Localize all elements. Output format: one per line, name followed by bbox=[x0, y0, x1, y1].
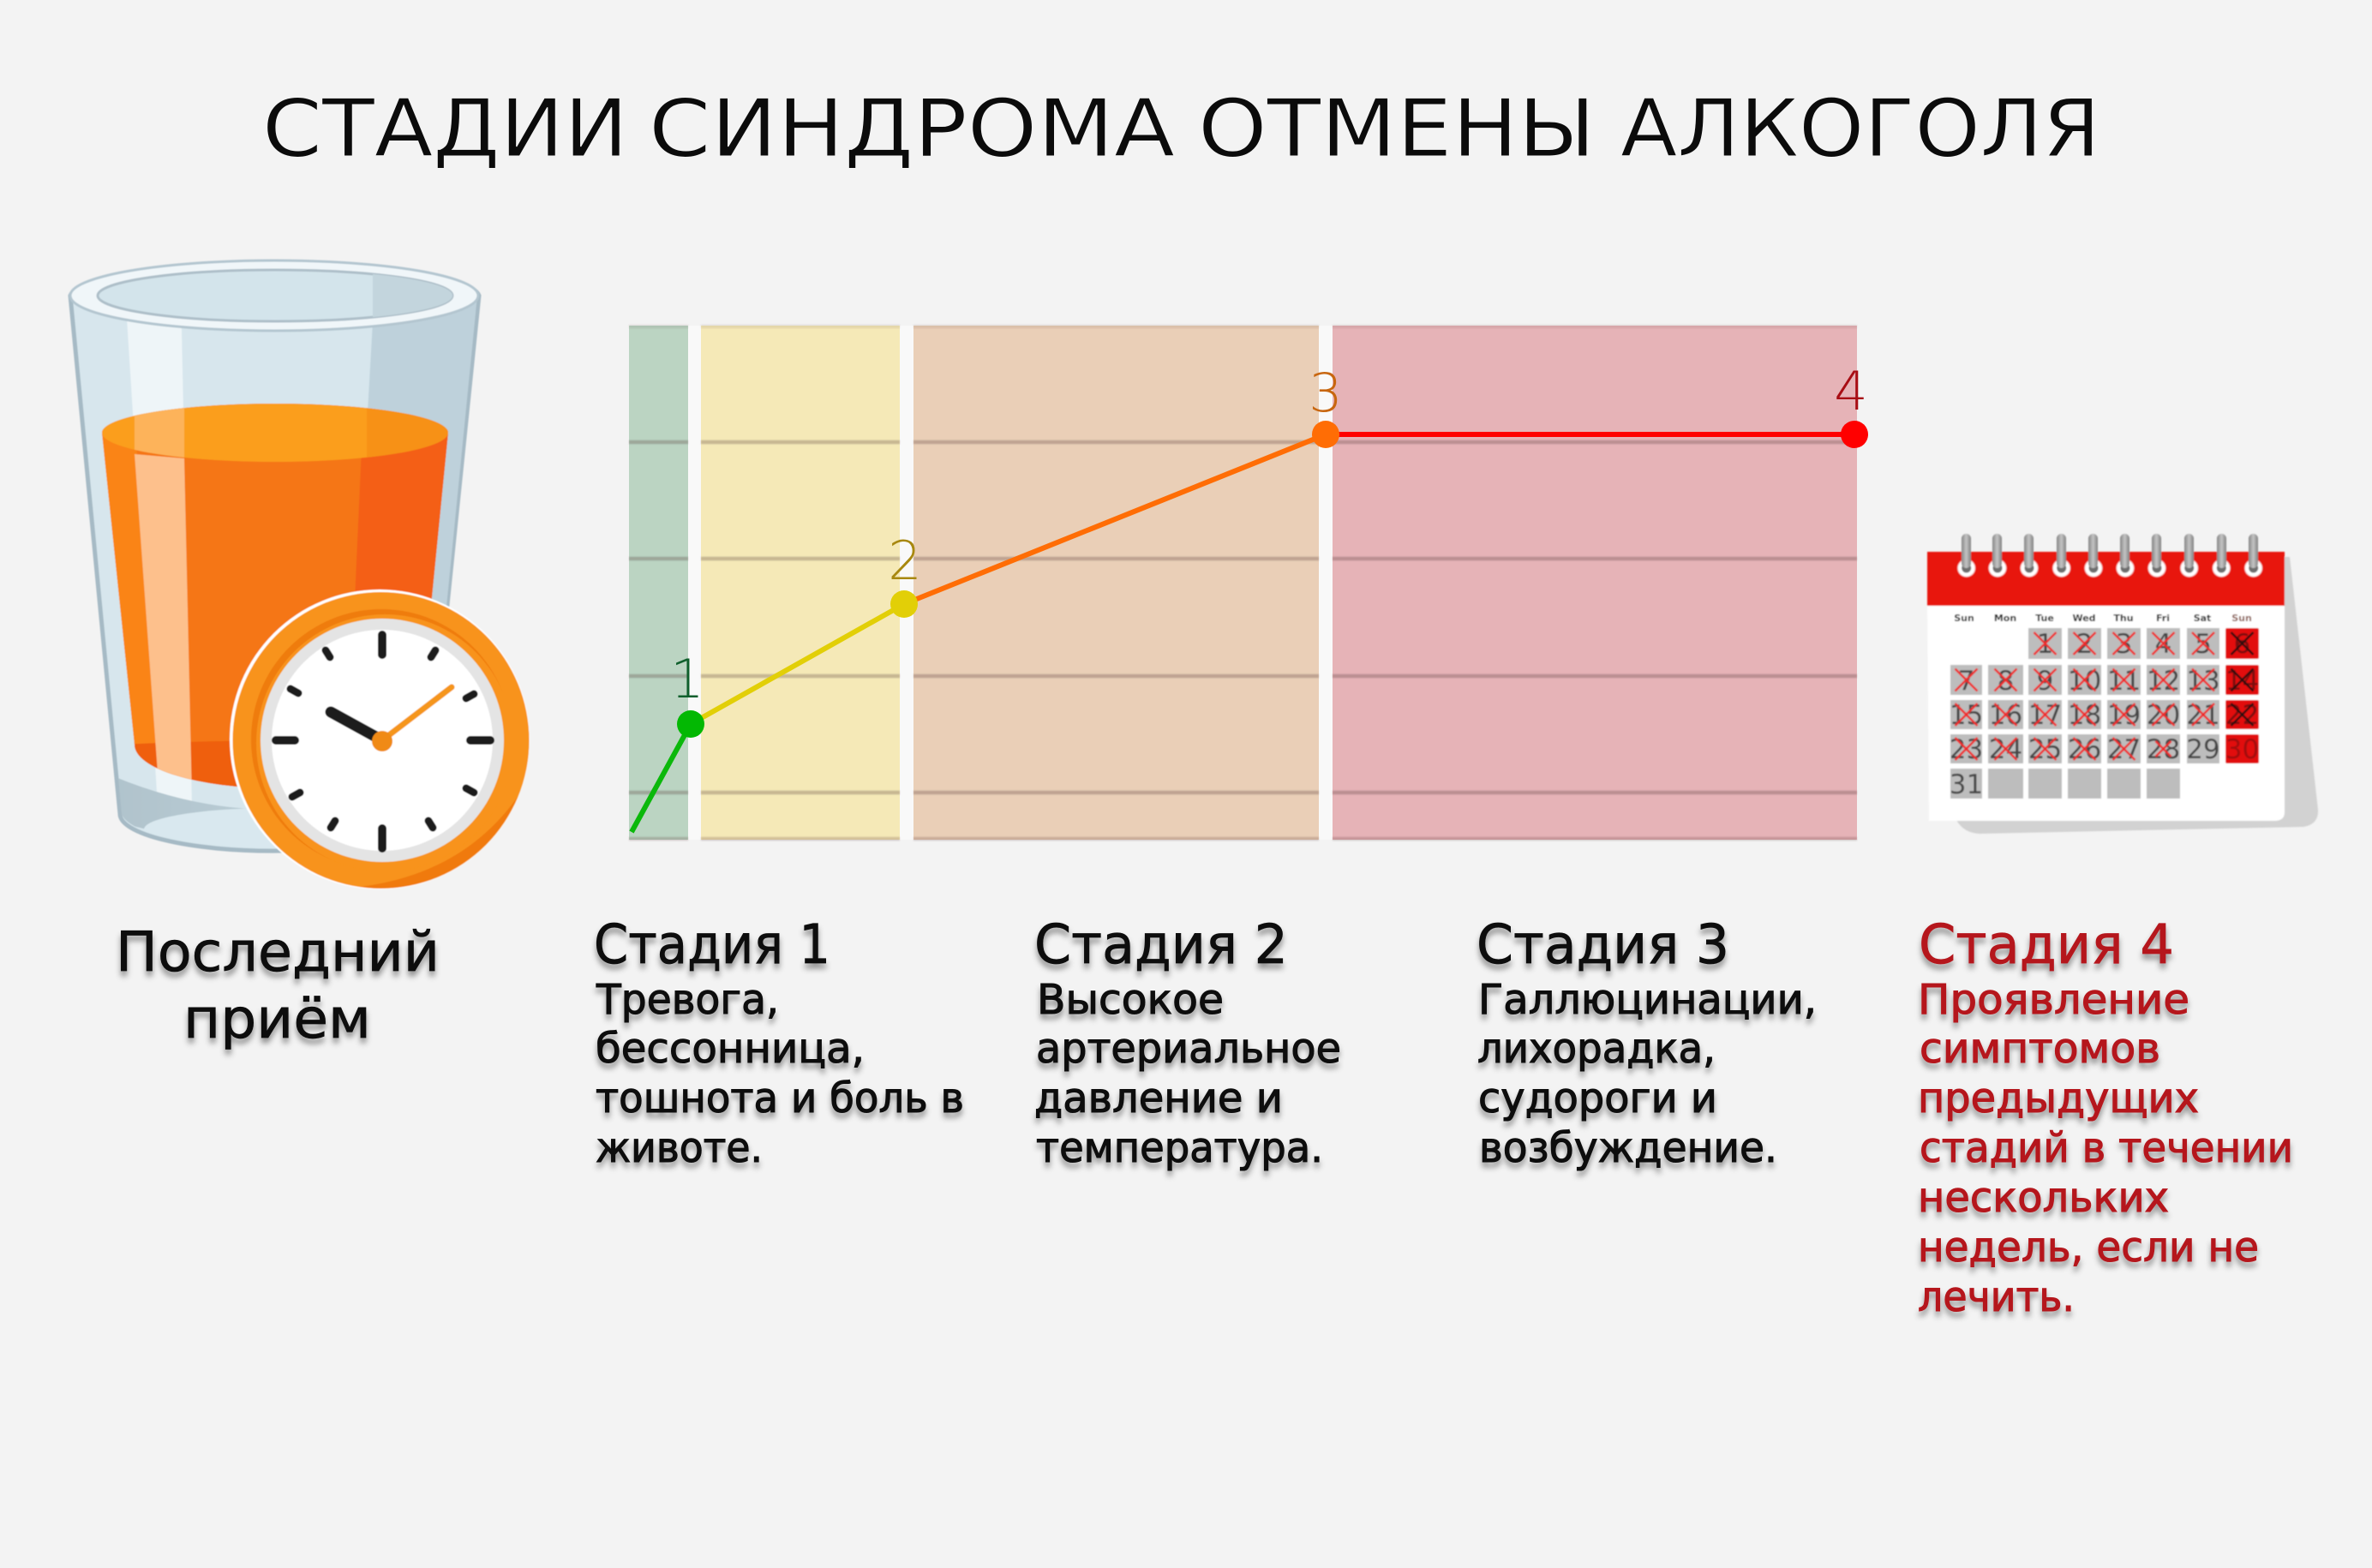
description: stage 1: бессонница, bbox=[596, 1025, 865, 1073]
point 1 bbox=[670, 648, 704, 738]
calendar weekday names: Fri bbox=[2156, 613, 2170, 624]
heading: stage 1: Стадия 1 bbox=[594, 913, 830, 976]
point 2: 2 bbox=[888, 530, 922, 592]
calendar dates: 1 bbox=[2037, 629, 2053, 660]
clock bbox=[230, 589, 530, 889]
description: stage 2: артериальное bbox=[1036, 1025, 1341, 1073]
calendar weekday names: Sat bbox=[2194, 613, 2211, 624]
heading: stage 2: Стадия 2 bbox=[1034, 913, 1288, 976]
calendar dates: 8 bbox=[1998, 666, 2014, 697]
calendar dates: 7 bbox=[1958, 666, 1974, 697]
calendar dates: 24 bbox=[1989, 734, 2022, 765]
calendar dates: 9 bbox=[2037, 666, 2053, 697]
text block: stage 4 bbox=[1918, 913, 2293, 1321]
calendar dates: 30 bbox=[2225, 734, 2259, 765]
calendar weekday names: Wed bbox=[2072, 613, 2096, 624]
calendar dates: 26 bbox=[2068, 734, 2101, 765]
title: ОТМЕНЫ bbox=[1198, 82, 1596, 175]
calendar dates: 2 bbox=[2076, 629, 2093, 660]
description: stage 4: нескольких bbox=[1918, 1174, 2169, 1222]
calendar back page shadow bbox=[1956, 557, 2318, 834]
description: stage 4 bbox=[1918, 976, 2293, 1321]
icon: calendar bbox=[1927, 534, 2318, 834]
calendar dates: 15 bbox=[1950, 700, 1983, 731]
calendar weekday names bbox=[1954, 613, 2252, 624]
calendar dates: 27 bbox=[2107, 734, 2141, 765]
title: СИНДРОМА bbox=[649, 82, 1175, 175]
clock hands bbox=[331, 687, 452, 751]
description: stage 4: лечить. bbox=[1918, 1273, 2075, 1321]
title bbox=[262, 82, 2100, 175]
glass body bbox=[70, 262, 480, 851]
calendar dates: 23 bbox=[1950, 734, 1983, 765]
description: stage 4: симптомов bbox=[1920, 1025, 2160, 1073]
calendar dates: 16 bbox=[1989, 700, 2022, 731]
calendar dates: 6 bbox=[2234, 629, 2250, 660]
description: stage 3: судороги и bbox=[1478, 1074, 1717, 1122]
calendar dates: 19 bbox=[2107, 700, 2141, 731]
description: stage 4: предыдущих bbox=[1918, 1074, 2199, 1122]
description: stage 1: Тревога, bbox=[596, 976, 779, 1024]
description: stage 2 bbox=[1034, 976, 1341, 1172]
calendar red cells bbox=[2225, 628, 2259, 763]
calendar dates: 28 bbox=[2147, 734, 2180, 765]
calendar dates: 5 bbox=[2195, 629, 2212, 660]
description: stage 2: Высокое bbox=[1037, 976, 1224, 1024]
caption: last intake: приём bbox=[183, 988, 371, 1051]
point 3: 3 bbox=[1309, 362, 1343, 424]
calendar dates: 18 bbox=[2068, 700, 2101, 731]
calendar dates: 17 bbox=[2028, 700, 2062, 731]
calendar weekday names: Sun bbox=[1954, 613, 1974, 624]
text block: stage 2 bbox=[1034, 913, 1341, 1172]
description: stage 3 bbox=[1477, 976, 1817, 1172]
description: stage 1 bbox=[596, 976, 964, 1172]
glass rim bbox=[70, 260, 478, 331]
description: stage 1: тошнота и боль в bbox=[596, 1074, 964, 1122]
calendar dates: 21 bbox=[2186, 700, 2220, 731]
text block: stage 3 bbox=[1477, 913, 1817, 1172]
title: СТАДИИ bbox=[262, 82, 628, 175]
text block: stage 1 bbox=[594, 913, 964, 1172]
calendar dates: 31 bbox=[1950, 769, 1983, 800]
calendar dates: 3 bbox=[2116, 629, 2132, 660]
description: stage 4: недель, если не bbox=[1918, 1224, 2259, 1272]
caption: last intake: Последний bbox=[116, 921, 440, 984]
chart bands bbox=[629, 326, 1857, 840]
icon: glass of juice with clock bbox=[70, 260, 530, 889]
calendar header bbox=[1927, 552, 2285, 606]
calendar dates: 13 bbox=[2186, 666, 2220, 697]
point 1: 1 bbox=[670, 648, 704, 710]
calendar rings bbox=[1958, 534, 2262, 577]
heading: stage 4: Стадия 4 bbox=[1919, 913, 2174, 976]
calendar weekday names: Sun bbox=[2231, 613, 2252, 624]
description: stage 3: лихорадка, bbox=[1477, 1025, 1716, 1073]
description: stage 1: животе. bbox=[596, 1124, 763, 1172]
clock ticks bbox=[276, 635, 490, 848]
caption: last intake bbox=[116, 921, 440, 1051]
description: stage 2: температура. bbox=[1036, 1124, 1323, 1172]
calendar dates: 20 bbox=[2147, 700, 2180, 731]
line segments bbox=[632, 434, 1854, 832]
calendar weekday names: Tue bbox=[2035, 613, 2054, 624]
calendar dates: 25 bbox=[2028, 734, 2062, 765]
calendar weekday names: Mon bbox=[1994, 613, 2016, 624]
point 4: 4 bbox=[1834, 360, 1868, 422]
juice bbox=[101, 403, 449, 787]
description: stage 3: Галлюцинации, bbox=[1478, 976, 1817, 1024]
calendar dates: 22 bbox=[2225, 700, 2259, 731]
calendar dates: 12 bbox=[2147, 666, 2180, 697]
calendar page bbox=[1927, 600, 2285, 821]
calendar dates bbox=[1950, 629, 2259, 800]
calendar dates: 29 bbox=[2186, 734, 2220, 765]
calendar dates: 4 bbox=[2155, 629, 2171, 660]
calendar crossed-out marks bbox=[1956, 632, 2254, 760]
calendar weekday names: Thu bbox=[2113, 613, 2134, 624]
calendar dates: 10 bbox=[2068, 666, 2101, 697]
chart: stages timeline bbox=[629, 326, 1868, 840]
calendar dates: 11 bbox=[2107, 666, 2141, 697]
title: АЛКОГОЛЯ bbox=[1620, 82, 2100, 175]
description: stage 4: Проявление bbox=[1918, 976, 2189, 1024]
description: stage 4: стадий в течении bbox=[1920, 1124, 2293, 1172]
heading: stage 3: Стадия 3 bbox=[1477, 913, 1729, 976]
description: stage 2: давление и bbox=[1034, 1074, 1283, 1122]
calendar grey cells bbox=[1950, 628, 2219, 799]
description: stage 3: возбуждение. bbox=[1479, 1124, 1777, 1172]
calendar dates: 14 bbox=[2225, 666, 2259, 697]
